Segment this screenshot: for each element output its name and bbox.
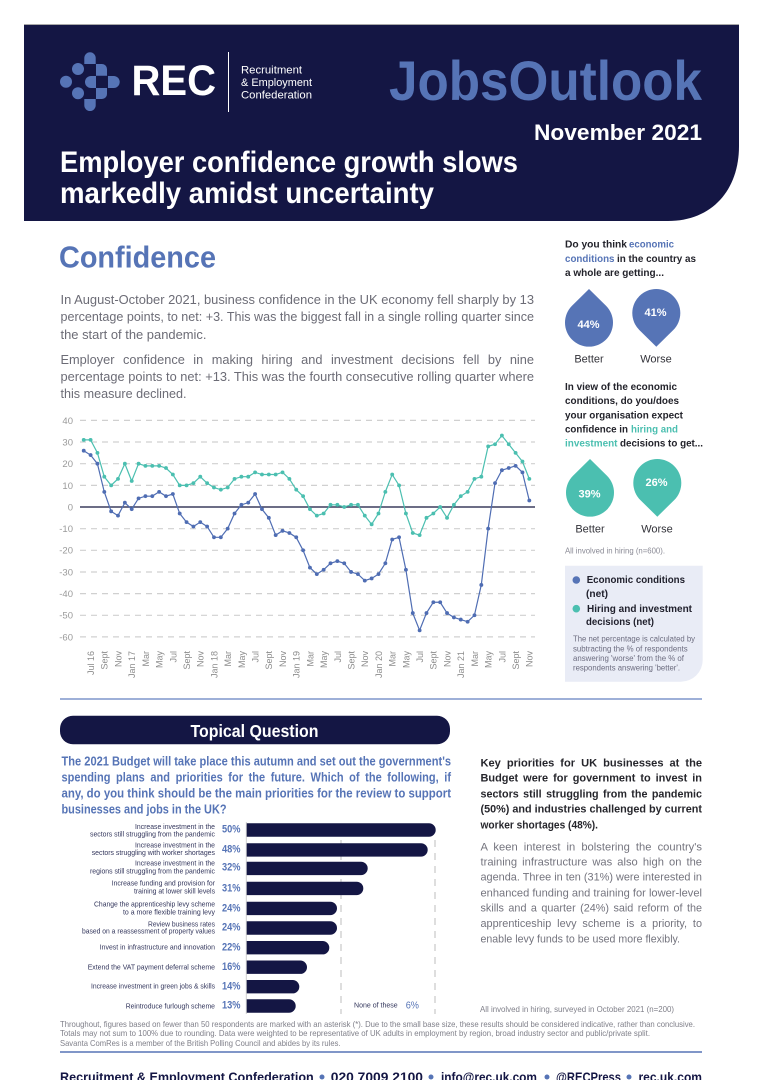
text block: survey question: The 2021 Budget will take place this autumn and set out the government's xyxy=(62,754,451,769)
legend item: economic conditions: Economic conditions xyxy=(587,574,685,586)
bar values: 24% xyxy=(222,903,241,915)
question text: conditions xyxy=(565,253,615,265)
x axis labels: Nov xyxy=(196,651,206,667)
x axis labels: Mar xyxy=(223,651,233,666)
bar values: 48% xyxy=(222,844,241,856)
x axis labels: Sept xyxy=(182,651,192,670)
text block: confidence summary: the start of the pandemic. xyxy=(60,327,206,342)
series: economic conditions xyxy=(84,451,529,630)
y axis labels: 0 xyxy=(68,502,73,514)
x axis labels: Jul xyxy=(415,651,425,663)
legend explanation: answering 'worse' from the % of xyxy=(573,654,685,663)
text block: training infrastructure: enable levy funds to be used more flexibly. xyxy=(480,933,680,945)
text block: training infrastructure: enhanced funding and training for lower-level xyxy=(480,888,702,900)
x axis labels: Sept xyxy=(346,651,356,670)
icon: worse drop 26%: Worse xyxy=(641,524,673,536)
x axis labels: Jul xyxy=(333,651,343,663)
x axis labels: Nov xyxy=(525,651,535,667)
icon: better drop 39% xyxy=(566,459,614,536)
icon: better drop 44%: Better xyxy=(574,354,604,366)
question text: a whole are getting... xyxy=(565,267,664,279)
bar labels: sectors struggling with worker shortages xyxy=(92,848,215,857)
x axis labels: May xyxy=(319,651,329,668)
survey base note: All involved in hiring, surveyed in October 2021 (n=200) xyxy=(480,1005,674,1014)
y axis labels: -60 xyxy=(59,632,73,643)
bar values: 13% xyxy=(222,1000,241,1012)
bar labels: Extend the VAT payment deferral scheme xyxy=(88,963,215,972)
x axis labels: Jan 19 xyxy=(292,651,302,678)
text block: survey question: spending plans and priorities for the future. Which of the following, if xyxy=(62,770,452,785)
legend item: hiring and investment: decisions (net) xyxy=(586,616,654,628)
logo strapline xyxy=(241,64,312,102)
legend explanation: The net percentage is calculated by xyxy=(573,635,695,644)
methodology footnote: Throughout, figures based on fewer than 50 respondents are marked with an asterisk (*). Due to the small base size, these results should be considered indicative, rather than conclusive. xyxy=(60,1020,695,1029)
bar labels: Change the apprenticeship levy scheme xyxy=(94,900,215,909)
y axis labels: -40 xyxy=(59,589,73,600)
bar values: 50% xyxy=(222,824,241,836)
y axis labels: -20 xyxy=(59,546,73,557)
text block: confidence summary: this measure declined. xyxy=(60,386,186,401)
main title: markedly amidst uncertainty xyxy=(60,177,435,210)
text block: training infrastructure: training infrastructure was also high on the xyxy=(480,857,702,869)
legend item: hiring and investment: Hiring and investment xyxy=(587,603,692,615)
heading: Topical Question xyxy=(60,716,450,744)
text block: training infrastructure: A keen interest in bolstering the country's xyxy=(480,842,702,854)
x axis labels: Mar xyxy=(305,651,315,666)
text block: training infrastructure xyxy=(480,842,702,945)
bar labels: Increase investment in the xyxy=(135,840,215,849)
icon: worse drop 41%: Worse xyxy=(640,354,672,366)
bar labels: Increase investment in the xyxy=(135,859,215,868)
panel: hiring and investment question xyxy=(565,381,703,536)
question text: in the country as xyxy=(617,253,696,265)
bar values: 14% xyxy=(222,980,241,992)
bar labels: Increase investment in green jobs & skills xyxy=(91,982,215,991)
icon: better drop 39%: Better xyxy=(575,524,605,536)
x axis labels: Jul 16 xyxy=(86,651,96,675)
x axis labels: Jan 18 xyxy=(209,651,219,678)
text block: training infrastructure: agenda. Three in ten (31%) were interested in xyxy=(480,872,702,884)
heading: Topical Question: Topical Question xyxy=(190,721,318,741)
bar labels: training at lower skill levels xyxy=(134,887,215,896)
legend item: economic conditions: (net) xyxy=(586,588,608,600)
question text: Do you think xyxy=(565,238,627,250)
bar values: 32% xyxy=(222,862,241,874)
header banner xyxy=(24,24,739,221)
bar chart: Budget priorities xyxy=(82,822,436,1014)
bar labels: Invest in infrastructure and innovation xyxy=(100,943,215,952)
x axis labels: Nov xyxy=(442,651,452,667)
question text: confidence in xyxy=(565,424,628,436)
text block: key priorities: worker shortages (48%). xyxy=(480,819,598,831)
y axis labels: 40 xyxy=(62,416,73,427)
icon: worse drop 26%: 26% xyxy=(645,477,668,489)
logo wordmark: REC xyxy=(132,57,216,105)
logo strapline: Confederation xyxy=(241,90,312,102)
text block: training infrastructure: apprenticeship levy scheme is a priority, to xyxy=(480,918,702,930)
icon: worse drop 41% xyxy=(632,289,680,366)
legend item: economic conditions xyxy=(572,574,685,600)
line chart: confidence over time xyxy=(59,416,535,678)
section heading: Confidence: Confidence xyxy=(59,240,216,274)
x axis labels: Jan 17 xyxy=(127,651,137,678)
question text: In view of the economic xyxy=(565,381,677,393)
bar values: 16% xyxy=(222,961,241,973)
x axis labels: Jul xyxy=(250,651,260,663)
x axis labels: Jul xyxy=(168,651,178,663)
question text: economic xyxy=(629,238,674,250)
bar labels: Increase investment in the xyxy=(135,822,215,831)
text block: survey question: businesses and jobs in the UK? xyxy=(62,801,227,816)
x axis labels: Nov xyxy=(360,651,370,667)
date: November 2021 xyxy=(534,120,702,145)
sample note: All involved in hiring (n=600). xyxy=(565,547,665,556)
y axis labels: 20 xyxy=(62,459,73,470)
logo strapline: Recruitment xyxy=(241,64,302,76)
x axis labels: Nov xyxy=(113,651,123,667)
none of these value: None of these xyxy=(354,1001,398,1010)
y axis labels: 10 xyxy=(62,481,73,492)
question text: conditions, do you/does xyxy=(565,395,679,407)
question text xyxy=(565,238,696,279)
icon: better drop 44% xyxy=(565,289,613,366)
question text xyxy=(565,381,703,450)
text block: key priorities: Budget were for government to invest in xyxy=(480,773,702,785)
series: hiring and investment decisions xyxy=(84,436,529,535)
icon: worse drop 26% xyxy=(633,459,681,536)
methodology footnote: Savanta ComRes is a member of the British Polling Council and abides by its rules. xyxy=(60,1039,340,1048)
x axis labels: May xyxy=(484,651,494,668)
bar labels: based on a reassessment of property values xyxy=(82,927,215,936)
icon: better drop 44%: 44% xyxy=(577,319,600,331)
text block: key priorities: Key priorities for UK businesses at the xyxy=(480,758,702,770)
bar values: 31% xyxy=(222,883,241,895)
logo strapline: & Employment xyxy=(241,77,312,89)
methodology footnote: Totals may not sum to 100% due to rounding. Data were weighted to be representative of UK adults in employment by region, broad industry sector and public/private split. xyxy=(60,1029,650,1038)
bar labels: sectors still struggling from the pandemic xyxy=(90,830,215,839)
x axis labels: Mar xyxy=(470,651,480,666)
bar labels: regions still struggling from the pandemic xyxy=(90,867,215,876)
text block: key priorities: (50%) and industries challenged by current xyxy=(480,804,702,816)
bar values: 22% xyxy=(222,942,241,954)
bar labels: Review business rates xyxy=(148,920,215,929)
legend explanation xyxy=(573,635,695,673)
text block: survey question xyxy=(62,754,452,816)
y axis labels: -10 xyxy=(59,524,73,535)
panel: economic conditions question xyxy=(565,238,696,366)
question text: decisions to get... xyxy=(620,438,703,450)
question text: your organisation expect xyxy=(565,410,683,422)
x axis labels xyxy=(86,651,535,678)
text block: confidence summary: Employer confidence in making hiring and investment decisions fell by nine xyxy=(60,352,534,367)
legend explanation: respondents answering 'better'. xyxy=(573,664,680,673)
y axis labels xyxy=(59,416,73,643)
x axis labels: Sept xyxy=(100,651,110,670)
icon: worse drop 41%: 41% xyxy=(644,307,667,319)
footer contact line xyxy=(60,1070,702,1080)
x axis labels: Mar xyxy=(388,651,398,666)
x axis labels: May xyxy=(401,651,411,668)
legend item: hiring and investment xyxy=(572,603,692,628)
bar labels: to a more flexible training levy xyxy=(123,908,215,917)
question text: hiring and xyxy=(631,424,678,436)
x axis labels: May xyxy=(155,651,165,668)
text block: confidence summary xyxy=(60,292,534,401)
text block: confidence summary: percentage points to net: +13. This was the fourth consecutive rolling quarter where xyxy=(60,369,534,384)
x axis labels: Mar xyxy=(141,651,151,666)
text block: training infrastructure: skills and a quarter (24%) said reform of the xyxy=(480,903,702,915)
none of these value: 6% xyxy=(406,1000,419,1012)
icon: better drop 39%: 39% xyxy=(578,488,601,500)
x axis labels: Jan 21 xyxy=(456,651,466,678)
publication name: JobsOutlook xyxy=(389,49,703,112)
x axis labels: Sept xyxy=(511,651,521,670)
x axis labels: Sept xyxy=(429,651,439,670)
main title: Employer confidence growth slows xyxy=(60,146,518,179)
bar values: 24% xyxy=(222,922,241,934)
text block: survey question: any, do you think should be the main priorities for the review to support xyxy=(62,786,452,801)
y axis labels: -50 xyxy=(59,611,73,622)
x axis labels: Jan 20 xyxy=(374,651,384,678)
text block: confidence summary: In August-October 2021, business confidence in the UK economy fell sharply by 13 xyxy=(60,292,534,307)
question text: investment xyxy=(565,438,618,450)
icon: REC logo mark xyxy=(60,52,120,111)
y axis labels: 30 xyxy=(62,438,73,448)
bar labels: Increase funding and provision for xyxy=(112,879,216,888)
bar labels xyxy=(82,822,216,1010)
bar values xyxy=(222,824,241,1012)
x axis labels: Nov xyxy=(278,651,288,667)
text block: key priorities xyxy=(480,758,702,831)
x axis labels: May xyxy=(237,651,247,668)
bar labels: Reintroduce furlough scheme xyxy=(126,1001,215,1010)
y axis labels: -30 xyxy=(59,567,73,578)
x axis labels: Sept xyxy=(264,651,274,670)
text block: confidence summary: percentage points, to net: +3. This was the biggest fall in a single rolling quarter since xyxy=(60,309,534,324)
none of these value xyxy=(354,1000,419,1012)
text block: key priorities: sectors still struggling from the pandemic xyxy=(480,789,702,801)
methodology footnote xyxy=(60,1020,695,1048)
panel: chart legend xyxy=(565,566,703,682)
legend explanation: subtracting the % of respondents xyxy=(573,644,688,654)
bars xyxy=(247,823,436,1013)
x axis labels: Jul xyxy=(497,651,507,663)
main title xyxy=(60,146,518,210)
